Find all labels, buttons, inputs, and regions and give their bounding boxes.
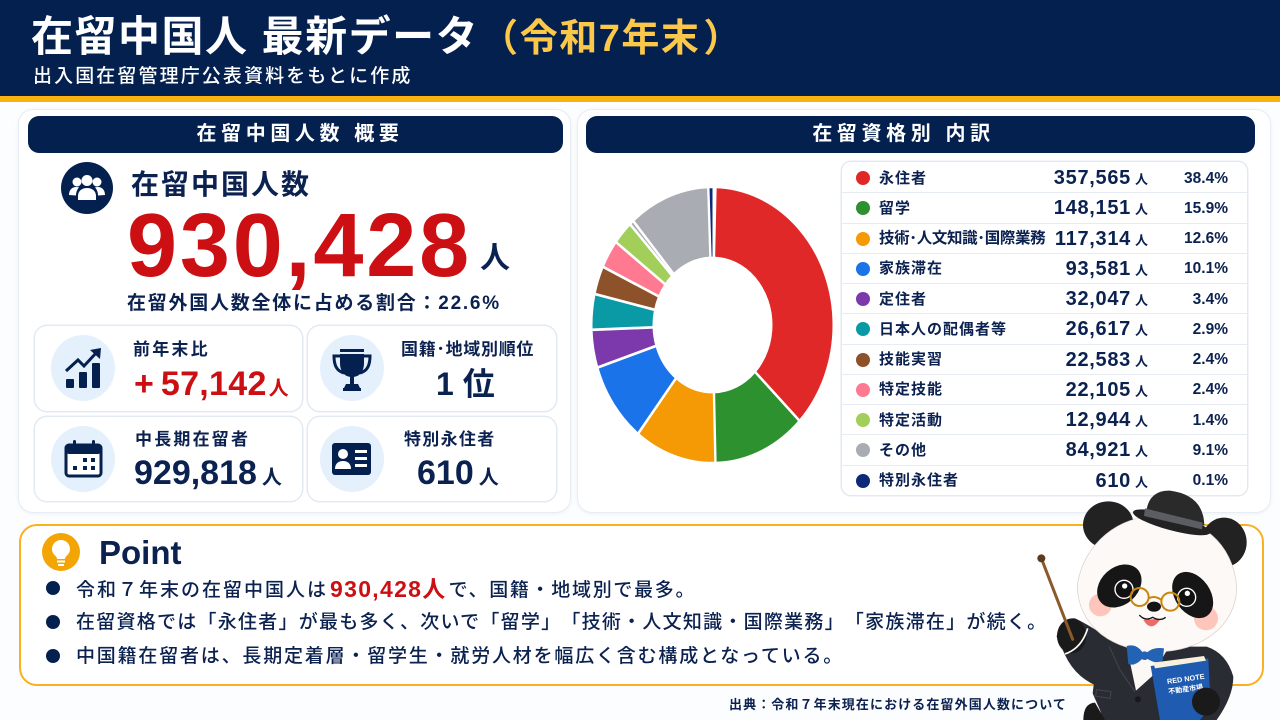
paw xyxy=(1192,688,1220,716)
icon: light bulb xyxy=(42,533,80,571)
point heading: Point xyxy=(99,534,181,571)
hand xyxy=(1057,619,1088,654)
icon: growth chart xyxy=(51,335,115,401)
shirt xyxy=(1127,647,1167,691)
card: special permanent xyxy=(308,417,556,501)
head xyxy=(1077,517,1237,652)
bullet 2: 在留資格では「永住者」が最も多く、次いで「留学」「技術・人文知識・国際業務」「家族滞在」が続く。 xyxy=(76,612,1047,633)
source note: 出典：令和７年末現在における在留外国人数について xyxy=(729,697,1067,712)
row: long-term residents xyxy=(842,283,1247,313)
row: dependents: 93,581 xyxy=(1066,258,1131,280)
row: special permanent residents: 610 xyxy=(1096,470,1131,492)
icon: people xyxy=(61,162,113,214)
row: other: 84,921 xyxy=(1066,439,1131,461)
row: long-term residents: 3.4% xyxy=(1193,291,1228,308)
value: 929,818人 xyxy=(134,454,282,492)
icon: trophy xyxy=(320,335,384,401)
row: students: 留学 xyxy=(879,200,911,217)
panel: overview xyxy=(19,110,570,512)
panel heading: breakdown xyxy=(586,116,1255,153)
cheeks xyxy=(1089,594,1218,630)
row: designated activities: 12,944 xyxy=(1066,409,1131,431)
row: technical intern xyxy=(842,344,1247,374)
row: engineers: 12.6% xyxy=(1184,230,1228,247)
row: special permanent residents: 人 xyxy=(1135,475,1148,490)
row: designated activities: 人 xyxy=(1135,414,1148,429)
row: permanent residents: 人 xyxy=(1135,172,1148,187)
glasses xyxy=(1131,588,1179,611)
panel heading: overview: 在留中国人数 概要 xyxy=(197,123,403,145)
value: +57,142人 xyxy=(134,365,289,403)
nose and mouth xyxy=(1139,602,1166,626)
total value: 930,428 xyxy=(127,196,472,296)
eye patches xyxy=(1089,556,1222,626)
row: special permanent residents: 特別永住者 xyxy=(879,472,959,489)
label: 特別永住者 xyxy=(404,430,496,449)
row: specified skilled: 22,105 xyxy=(1066,379,1131,401)
row: other: その他 xyxy=(879,442,927,459)
legend table xyxy=(842,162,1247,495)
card: mid-long term xyxy=(35,417,302,501)
book xyxy=(1151,656,1211,720)
row: specified skilled xyxy=(842,374,1247,404)
row: special permanent residents: 0.1% xyxy=(1193,472,1228,489)
row: engineers: 117,314 xyxy=(1055,228,1131,250)
row: technical intern: 技能実習 xyxy=(879,351,943,368)
row: dependents: 人 xyxy=(1135,263,1148,278)
value: 1 位 xyxy=(436,366,495,402)
row: spouses: 2.9% xyxy=(1193,321,1228,338)
header band xyxy=(0,0,1280,102)
panel heading: overview xyxy=(28,116,563,153)
row: spouses xyxy=(842,313,1247,344)
panda mascot xyxy=(1037,490,1247,720)
bullet 1: 令和７年末の在留中国人は930,428人で、国籍・地域別で最多。 xyxy=(76,576,696,602)
row: dependents xyxy=(842,253,1247,283)
row: other: 9.1% xyxy=(1193,442,1228,459)
row: students: 15.9% xyxy=(1184,200,1228,217)
row: students: 人 xyxy=(1135,202,1148,217)
share note: 在留外国人数全体に占める割合：22.6% xyxy=(127,293,501,314)
label: 国籍･地域別順位 xyxy=(401,340,534,359)
row: students: 148,151 xyxy=(1054,197,1131,219)
row: specified skilled: 特定技能 xyxy=(879,381,943,398)
row: technical intern: 22,583 xyxy=(1066,349,1131,371)
row: engineers xyxy=(842,223,1247,253)
card: year over year xyxy=(35,326,302,411)
subtitle: 出入国在留管理庁公表資料をもとに作成 xyxy=(33,66,412,87)
row: engineers: 技術･人文知識･国際業務 xyxy=(879,230,1045,247)
card: rank xyxy=(308,326,556,411)
book: RED NOTE xyxy=(1166,672,1205,686)
row: permanent residents: 永住者 xyxy=(879,170,927,186)
row: technical intern: 2.4% xyxy=(1193,351,1228,368)
panel: point xyxy=(19,524,1264,686)
row: dependents: 10.1% xyxy=(1184,260,1228,277)
row: designated activities xyxy=(842,404,1247,434)
total label: 在留中国人数 xyxy=(131,169,311,200)
title: 在留中国人 最新データ（令和7年末） xyxy=(31,13,743,60)
bow tie xyxy=(1127,645,1164,665)
row: permanent residents xyxy=(842,162,1247,192)
row: special permanent residents xyxy=(856,470,1228,492)
row: technical intern: 人 xyxy=(1135,354,1148,369)
pointer xyxy=(1037,554,1073,639)
icon: calendar xyxy=(51,426,115,492)
label: 中長期在留者 xyxy=(135,430,250,449)
row: spouses: 26,617 xyxy=(1066,318,1131,340)
bullet 3: 中国籍在留者は、長期定着層・留学生・就労人材を幅広く含む構成となっている。 xyxy=(76,646,844,667)
row: permanent residents: 357,565 xyxy=(1054,167,1131,189)
row: permanent residents: 38.4% xyxy=(1184,170,1228,186)
row: other: 人 xyxy=(1135,444,1148,459)
book: 不動産市場 xyxy=(1168,682,1204,696)
donut chart xyxy=(592,188,832,462)
hat xyxy=(1131,491,1212,540)
panel: breakdown xyxy=(578,110,1270,512)
eyes xyxy=(1115,580,1196,606)
icon: id card xyxy=(320,426,384,492)
row: long-term residents: 人 xyxy=(1135,293,1148,308)
row: other xyxy=(842,434,1247,465)
row: engineers: 人 xyxy=(1135,233,1148,248)
ears xyxy=(1083,501,1247,567)
row: designated activities: 特定活動 xyxy=(879,412,943,429)
suit xyxy=(1057,618,1233,720)
row: long-term residents: 32,047 xyxy=(1066,288,1131,310)
row: specified skilled: 人 xyxy=(1135,384,1148,399)
panel heading: breakdown: 在留資格別 内訳 xyxy=(812,123,995,145)
row: long-term residents: 定住者 xyxy=(879,291,927,308)
row: designated activities: 1.4% xyxy=(1193,412,1228,429)
row: specified skilled: 2.4% xyxy=(1193,381,1228,398)
row: dependents: 家族滞在 xyxy=(879,260,943,277)
value: 610人 xyxy=(417,454,499,492)
label: 前年末比 xyxy=(133,340,210,359)
row: spouses: 人 xyxy=(1135,323,1148,338)
row: students xyxy=(842,192,1247,223)
row: spouses: 日本人の配偶者等 xyxy=(879,321,1007,338)
total unit: 人 xyxy=(480,242,510,275)
